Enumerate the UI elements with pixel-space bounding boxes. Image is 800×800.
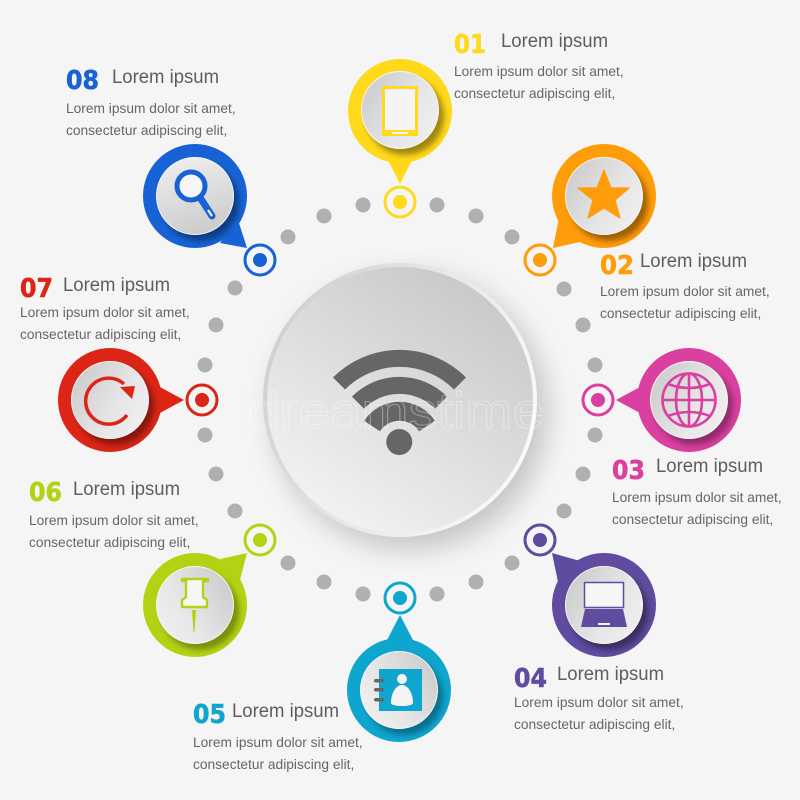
text block 01: consectetur adipiscing elit, [454,86,615,101]
icon: tablet [382,86,418,136]
text block 01: Lorem ipsum dolor sit amet, [454,64,624,79]
text block 06: Lorem ipsum dolor sit amet, [29,513,199,528]
marker: cyan ring [385,583,415,613]
panel: central wifi disc [263,263,547,549]
text block 03: consectetur adipiscing elit, [612,512,773,527]
marker: purple ring [525,525,555,555]
panel: step 06 [29,478,275,657]
pin: purple bubble [552,553,656,657]
text block 08: Lorem ipsum dolor sit amet, [66,101,236,116]
number 01: 01 [454,30,486,60]
pin: blue bubble [143,144,247,248]
icon: star [578,170,629,218]
marker: magenta ring [583,385,613,415]
heading 01: Lorem ipsum [501,31,608,52]
panel: step 02 [525,144,770,321]
icon: wifi symbol [339,358,460,455]
marker: orange ring [525,245,555,275]
heading 06: Lorem ipsum [73,479,180,500]
panel: step 03 [583,348,782,527]
icon: push pin [182,579,208,632]
text block 07: Lorem ipsum dolor sit amet, [20,305,190,320]
marker: blue ring [245,245,275,275]
marker: yellow ring [385,187,415,217]
panel: step 04 [514,525,684,732]
heading 07: Lorem ipsum [63,275,170,296]
pin: red bubble [58,348,184,452]
text block 06: consectetur adipiscing elit, [29,535,190,550]
pin: orange bubble [552,144,656,248]
panel: step 08 [66,66,275,275]
heading 04: Lorem ipsum [557,664,664,685]
watermark: dreamstime [248,383,544,439]
number 03: 03 [612,456,645,486]
text block 07: consectetur adipiscing elit, [20,327,181,342]
number 07: 07 [20,274,53,304]
text block 08: consectetur adipiscing elit, [66,123,227,138]
panel: step 07 [20,274,217,452]
number 05: 05 [193,700,226,730]
panel: step 01 [348,30,624,217]
icon: magnifier [177,172,212,216]
icon: laptop [581,582,627,627]
text block 03: Lorem ipsum dolor sit amet, [612,490,782,505]
heading 05: Lorem ipsum [232,701,339,722]
number 02: 02 [600,251,634,281]
pin: yellow bubble [348,59,452,184]
text block 05: consectetur adipiscing elit, [193,757,354,772]
pin: lime bubble [143,553,247,657]
marker: lime ring [245,525,275,555]
number 06: 06 [29,478,62,508]
number 08: 08 [66,66,99,96]
icon: globe [662,373,716,427]
number 04: 04 [514,664,547,694]
heading 02: Lorem ipsum [640,251,747,272]
heading 03: Lorem ipsum [656,456,763,477]
text block 02: Lorem ipsum dolor sit amet, [600,284,770,299]
text block 04: Lorem ipsum dolor sit amet, [514,695,684,710]
icon: contact book [374,669,422,711]
pin: magenta bubble [616,348,741,452]
dotted ring connector [198,198,602,602]
panel: step 05 [193,583,451,772]
text block 05: Lorem ipsum dolor sit amet, [193,735,363,750]
marker: red ring [187,385,217,415]
text block 04: consectetur adipiscing elit, [514,717,675,732]
heading 08: Lorem ipsum [112,67,219,88]
text block 02: consectetur adipiscing elit, [600,306,761,321]
icon: refresh arrow [86,378,135,424]
pin: cyan bubble [347,615,451,742]
